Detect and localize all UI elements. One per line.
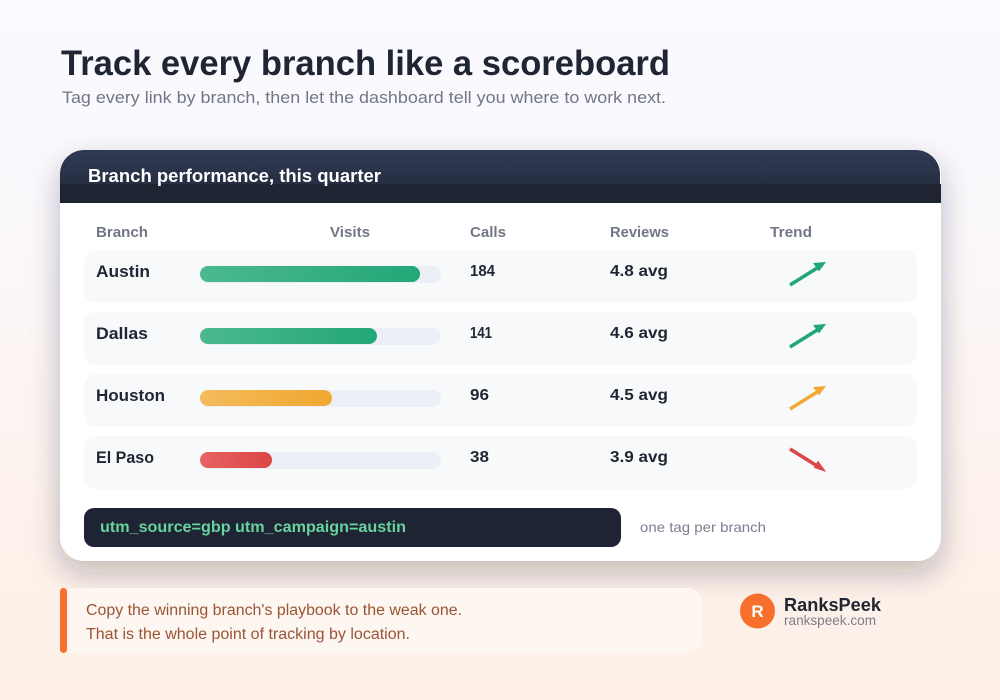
table column headers: Trend (770, 225, 812, 241)
icon: brand badge (740, 594, 775, 628)
row: Austin: Austin (96, 262, 150, 281)
code tag note: one tag per branch (640, 519, 766, 535)
card header band: Branch performance, this quarter (88, 166, 381, 186)
panel: branch performance card (60, 150, 941, 561)
row: Austin (84, 250, 917, 303)
icon: trend up arrow amber (790, 386, 825, 409)
table column headers: Visits (330, 225, 370, 241)
callout: That is the whole point of tracking by location. (86, 626, 410, 643)
row: El Paso: 38 (470, 449, 489, 466)
code tag bar: utm_source=gbp utm_campaign=austin (100, 519, 406, 536)
table column headers: Reviews (610, 225, 669, 241)
row: Houston: 96 (470, 387, 489, 404)
callout: Copy the winning branch's playbook to the weak one. (86, 602, 462, 619)
brand url: rankspeek.com (784, 612, 876, 628)
row: Houston: Houston (96, 386, 165, 405)
brand logo (740, 594, 882, 628)
row: Dallas: 141 (470, 325, 492, 342)
row: Dallas (84, 312, 917, 365)
row: Dallas: 4.6 avg (610, 325, 668, 342)
card header band (60, 150, 941, 203)
icon: trend down arrow (790, 449, 825, 471)
row: Dallas: Dallas (96, 324, 148, 343)
table column headers: Branch (96, 225, 148, 241)
row: Austin: 4.8 avg (610, 263, 668, 280)
subtitle: Tag every link by branch, then let the dashboard tell you where to work next. (62, 88, 666, 107)
row: Austin: 184 (470, 263, 495, 280)
brand name: RanksPeek (784, 594, 882, 615)
row: El Paso (84, 436, 917, 489)
icon: brand badge: R (751, 602, 764, 621)
row: El Paso: 3.9 avg (610, 449, 668, 466)
table column headers (96, 225, 812, 241)
icon: trend up arrow (790, 324, 825, 347)
code tag bar (84, 508, 621, 547)
title: Track every branch like a scoreboard (61, 44, 670, 83)
row: Houston (84, 374, 917, 427)
callout (60, 588, 702, 653)
icon: trend up arrow (790, 262, 825, 285)
row: Houston: 4.5 avg (610, 387, 668, 404)
row: El Paso: El Paso (96, 448, 154, 467)
table column headers: Calls (470, 225, 506, 241)
